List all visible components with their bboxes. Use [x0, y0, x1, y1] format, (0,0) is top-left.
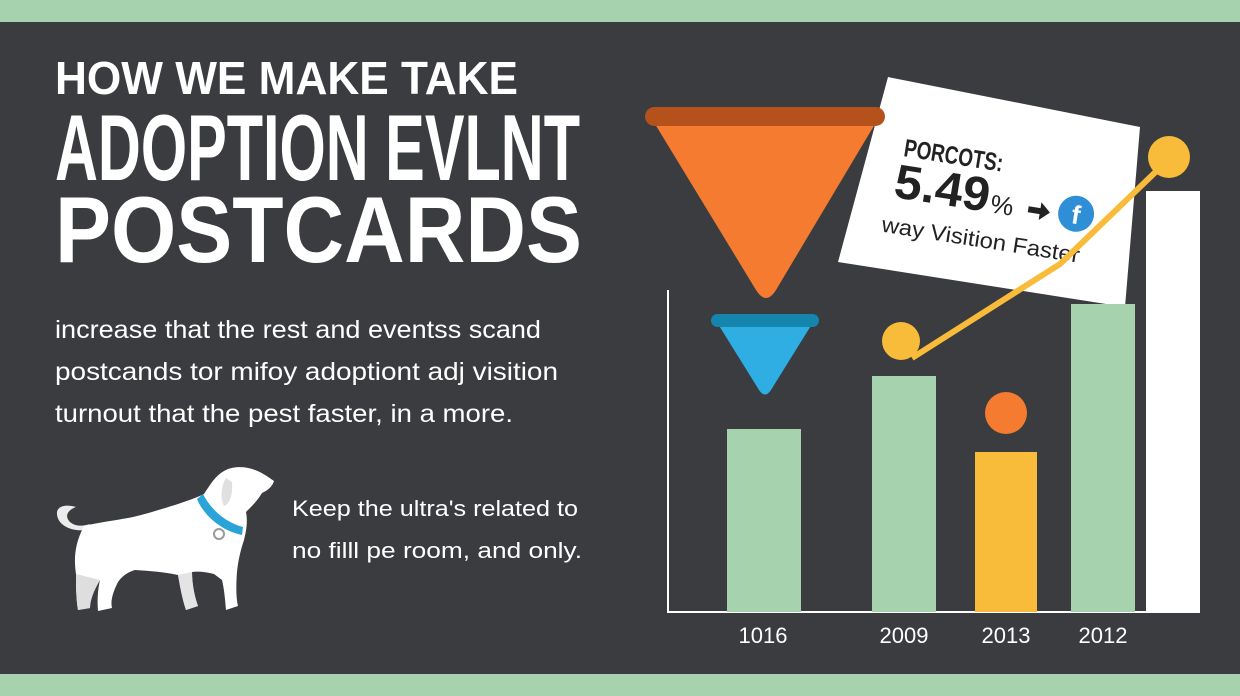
year labels: 2009	[880, 623, 928, 648]
intro paragraph: turnout that the pest faster, in a more.	[55, 400, 513, 428]
title: POSTCARDS	[55, 177, 582, 282]
text block: dog note: no filll pe room, and only.	[292, 538, 582, 563]
bar chart	[668, 191, 1200, 613]
year labels: 2012	[1079, 623, 1127, 648]
trend line	[882, 136, 1190, 360]
callout card: f	[1069, 199, 1083, 230]
callout card: 5.49	[891, 155, 994, 223]
callout card: %	[988, 188, 1016, 222]
title: HOW WE MAKE TAKE	[55, 52, 518, 104]
callout card: way Visition Faster	[879, 212, 1082, 268]
icon: dog	[57, 467, 274, 611]
callout card: PORCOTS:	[902, 134, 1005, 178]
intro paragraph: increase that the rest and eventss scand	[55, 316, 541, 344]
funnel: orange	[645, 107, 885, 298]
text block: dog note	[292, 496, 582, 563]
year labels	[739, 623, 1127, 648]
callout card	[838, 77, 1140, 307]
text block: dog note: Keep the ultra's related to	[292, 496, 578, 521]
funnel: blue	[711, 314, 819, 394]
title	[55, 52, 582, 282]
year labels: 2013	[982, 623, 1030, 648]
intro paragraph: postcands tor mifoy adoptiont adj visition	[55, 358, 558, 386]
year labels: 1016	[739, 623, 787, 648]
title: ADOPTION EVLNT	[55, 95, 580, 200]
intro paragraph	[55, 316, 558, 428]
